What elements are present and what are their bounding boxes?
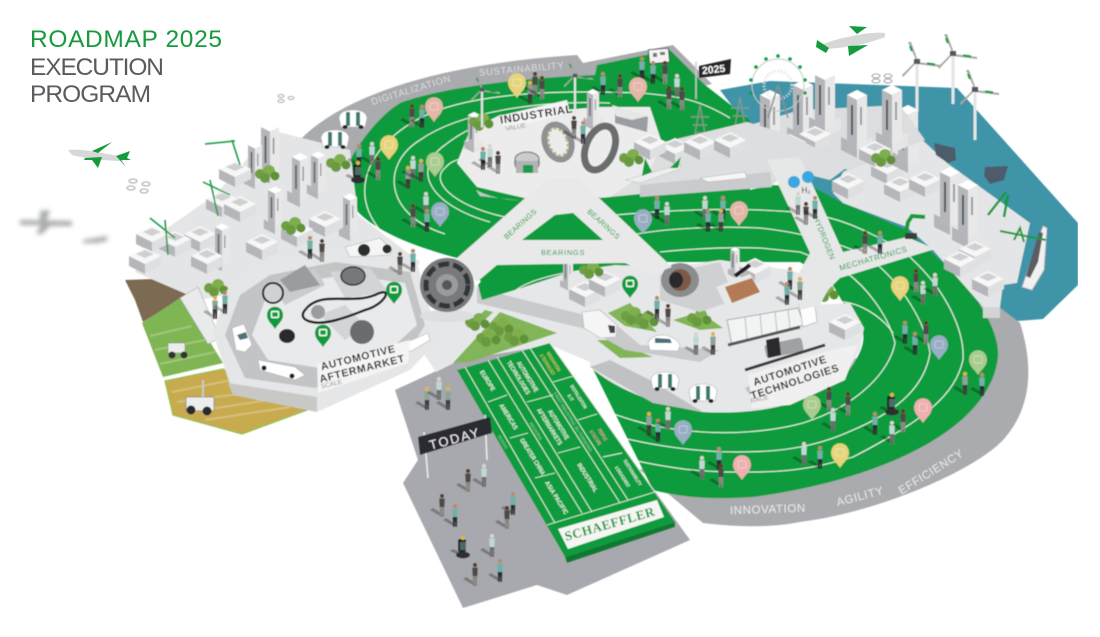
title xyxy=(30,26,222,108)
central industrial strip xyxy=(600,122,850,198)
outer grey ring: bottom with values: INNOVATION xyxy=(730,503,806,517)
pulleys xyxy=(263,265,374,344)
lane labels: EUROPE xyxy=(478,369,496,393)
lane labels: AFTERMARKETS xyxy=(535,407,563,447)
outer grey ring: top with values: SUSTAINABILITY xyxy=(479,60,565,79)
lane labels: & ENGAGEMENT xyxy=(613,465,631,489)
grey road xyxy=(477,288,720,362)
bearings A road: BEARINGS xyxy=(541,248,585,257)
outer grey ring: top with values: DIGITALIZATION xyxy=(370,73,452,108)
electric motor xyxy=(716,265,764,310)
transformer xyxy=(612,105,648,132)
people: on upper track xyxy=(345,57,726,232)
SCHAEFFLER logo: SCHAEFFLER xyxy=(563,504,657,544)
buildings xyxy=(560,256,576,290)
label: automotive technologies xyxy=(748,345,858,408)
billboard xyxy=(648,48,670,64)
hydrogen symbols: H₂ xyxy=(802,186,810,195)
outer grey ring: top with values xyxy=(300,45,712,180)
lane labels: INNOVATION xyxy=(545,351,562,373)
vehicles xyxy=(232,324,252,352)
TODAY banner: TODAY xyxy=(427,425,482,453)
power pylons xyxy=(691,97,749,140)
label: automotive aftermarket: SCALE xyxy=(320,378,343,391)
tanker truck xyxy=(727,304,817,345)
lane labels: AUTOMOTIVE xyxy=(546,409,570,442)
green running track xyxy=(342,50,998,498)
autonomous pods xyxy=(321,110,367,149)
turbines on island xyxy=(471,75,500,128)
ferris wheel xyxy=(749,54,807,118)
wind turbines offshore xyxy=(902,34,999,140)
outer grey ring: bottom with values: EFFICIENCY xyxy=(897,448,966,497)
lane labels: FIRST INDUSTRIAL BU FORWARD xyxy=(553,391,593,453)
ships and cranes xyxy=(934,143,1047,290)
label: automotive technologies: AUTOMOTIVE xyxy=(752,354,828,389)
small green jet xyxy=(625,157,681,183)
industrial island xyxy=(457,61,666,205)
INDUSTRIAL sign: INDUSTRIAL xyxy=(499,103,574,127)
people: on islands and roads xyxy=(203,116,883,355)
lane labels: PEOPLE xyxy=(596,428,608,442)
lane labels: AUTOMOTIVE xyxy=(515,360,540,394)
greenhouse strip xyxy=(180,287,220,344)
water xyxy=(720,81,1078,323)
lane labels xyxy=(478,351,643,516)
hydrogen mechatronics road: HYDROGEN xyxy=(812,215,837,261)
lane labels: REGIONS xyxy=(497,434,509,450)
belt drive xyxy=(303,292,386,323)
start area: grey plaza xyxy=(395,345,690,608)
2025 finish flag xyxy=(696,59,731,99)
automotive technologies and centre land xyxy=(418,247,864,413)
lane labels: ASIA PACIFIC xyxy=(543,480,569,516)
vehicles xyxy=(651,372,679,391)
service pins xyxy=(267,307,283,329)
pin xyxy=(622,276,638,298)
port land right xyxy=(832,105,1030,318)
plane: left xyxy=(68,142,131,168)
hydrogen mechatronics road: MECHATRONICS xyxy=(838,245,908,273)
milestone pins xyxy=(380,73,987,480)
tractors xyxy=(168,343,188,358)
start block xyxy=(457,343,675,563)
lane labels: AMERICAS xyxy=(497,403,519,432)
lane labels: SUSTAINABILITY xyxy=(622,459,643,488)
label: automotive aftermarket: AFTERMARKET xyxy=(318,353,406,386)
label: automotive aftermarket: AUTOMOTIVE xyxy=(320,343,397,373)
lane labels: DIGITALIZATION xyxy=(568,384,588,410)
large brake wheel xyxy=(420,258,474,322)
lane labels: & IT xyxy=(566,393,574,403)
upper city xyxy=(720,70,925,170)
plane: top right xyxy=(816,26,885,56)
lane labels: TECHNOLOGIES xyxy=(505,360,531,396)
left city xyxy=(129,122,420,300)
2025 finish flag: 2025 xyxy=(701,63,726,77)
robot arm xyxy=(905,216,925,239)
drones xyxy=(127,74,892,193)
title: PROGRAM xyxy=(30,81,151,108)
lane labels: INDUSTRIAL xyxy=(575,462,599,494)
TODAY banner xyxy=(418,415,492,478)
outer grey ring: bottom with values xyxy=(640,300,1028,526)
lane labels: REGIONS xyxy=(529,421,544,441)
hydrogen symbols xyxy=(788,171,814,195)
high-speed train xyxy=(700,172,747,182)
INDUSTRIAL sign: VALUE xyxy=(505,122,527,133)
bearings A road xyxy=(457,178,672,282)
plane shadow on ground xyxy=(20,210,107,243)
automotive aftermarket platform xyxy=(213,238,474,412)
bearings xyxy=(514,121,622,175)
track lane lines xyxy=(365,92,963,472)
lane labels: & TECHNOLOGY xyxy=(538,353,556,377)
lawns xyxy=(453,303,723,363)
green behind the bearings arch xyxy=(478,262,612,300)
hydrogen mechatronics road xyxy=(767,157,935,310)
buildings xyxy=(464,112,484,153)
label: automotive technologies: RACE xyxy=(750,394,770,405)
bearings A road: BEARINGS xyxy=(502,207,539,241)
people: on today plaza xyxy=(415,377,516,586)
bearings A road: BEARINGS xyxy=(585,207,622,241)
lane lines xyxy=(465,343,655,525)
lane labels: GREATER CHINA xyxy=(518,437,546,477)
label: automotive aftermarket xyxy=(317,340,410,393)
brake disc xyxy=(661,263,699,297)
title: ROADMAP 2025 xyxy=(30,26,222,53)
cylinder xyxy=(745,337,825,370)
people: on lower track xyxy=(637,269,985,487)
title: EXECUTION xyxy=(30,54,164,81)
outer grey ring: bottom with values: AGILITY xyxy=(835,485,885,509)
fields xyxy=(125,278,307,434)
lane labels: & CULTURE xyxy=(588,429,602,447)
label: automotive technologies: TECHNOLOGIES xyxy=(749,362,841,402)
